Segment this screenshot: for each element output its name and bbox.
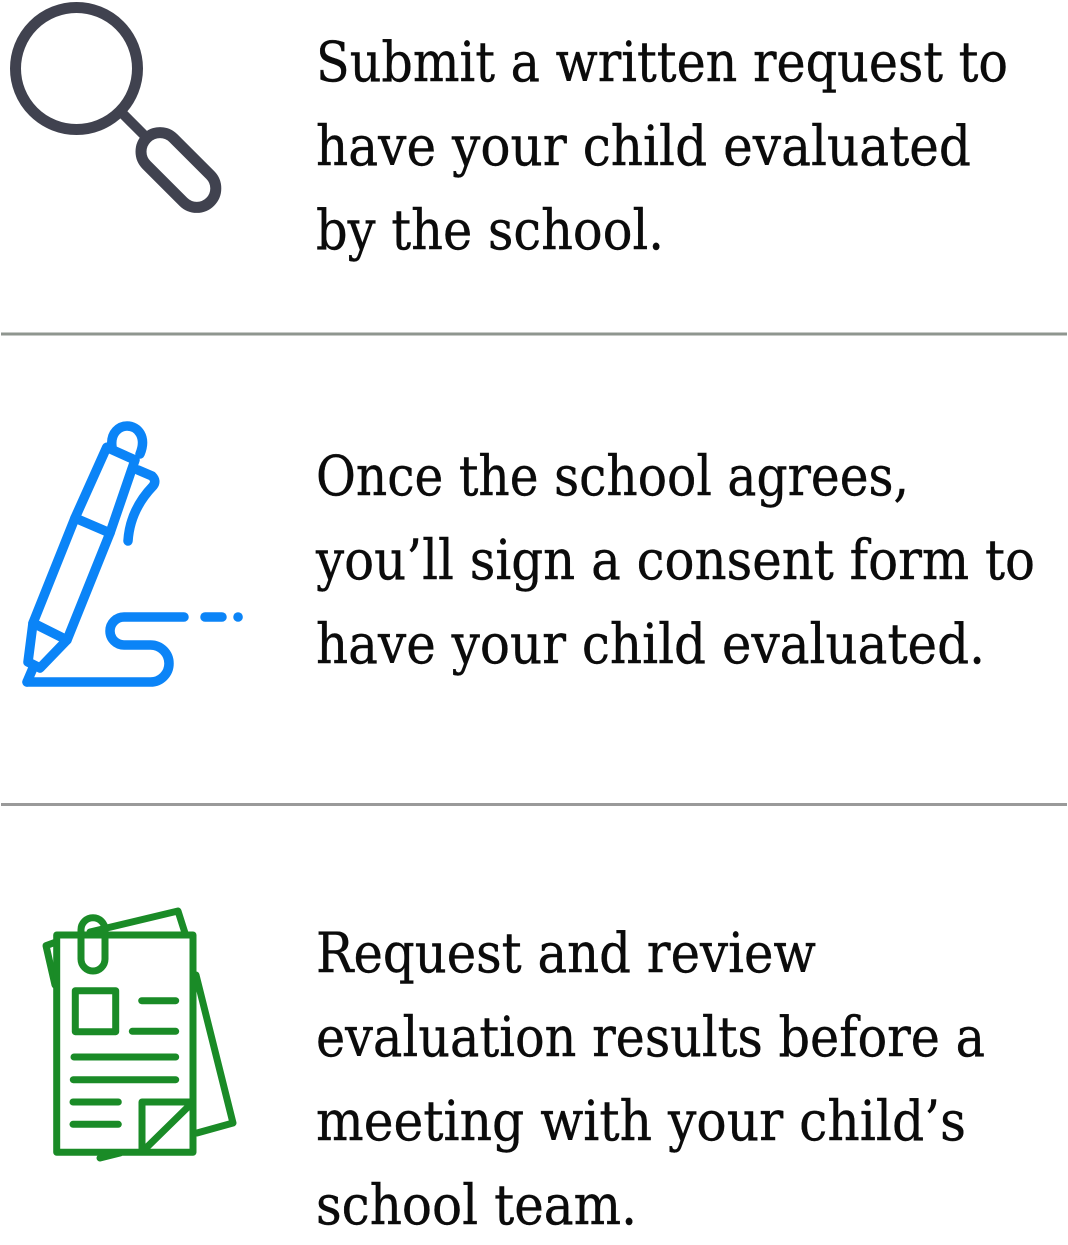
text: step 3: school team. [316, 1173, 637, 1237]
text: step 1 [316, 30, 1008, 262]
text: step 2 [315, 444, 1035, 676]
text: step 2: have your child evaluated. [316, 612, 985, 676]
text: step 3: evaluation results before a [316, 1005, 985, 1069]
text: step 3: meeting with your child’s [316, 1089, 966, 1153]
text: step 2: Once the school agrees, [316, 444, 909, 508]
text: step 3 [316, 921, 985, 1237]
icon: pen signing [27, 426, 238, 682]
icon: magnifying glass [16, 8, 224, 215]
icon: clipped documents [46, 911, 233, 1158]
text: step 1: by the school. [316, 198, 664, 262]
text: step 1: Submit a written request to [316, 30, 1008, 94]
text: step 3: Request and review [316, 921, 816, 985]
text: step 1: have your child evaluated [316, 114, 971, 178]
